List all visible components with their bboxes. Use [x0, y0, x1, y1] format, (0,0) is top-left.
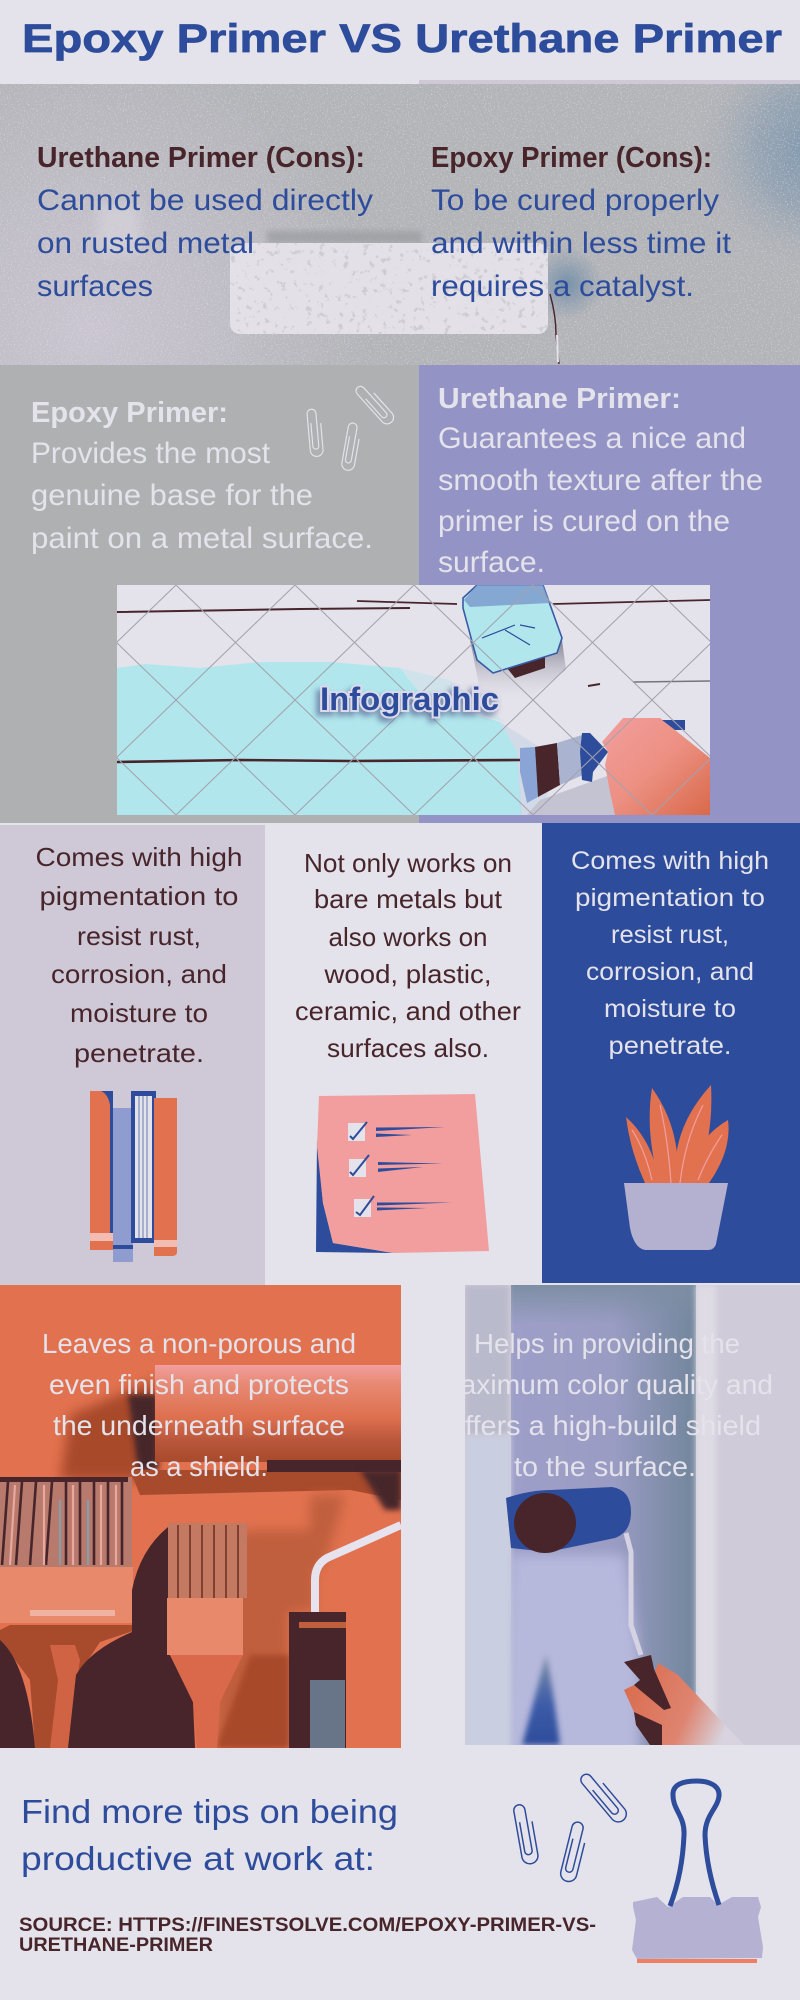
text block: call to action: Find more tips on being — [21, 1793, 398, 1830]
icon: paint brush — [520, 733, 608, 803]
text block: color quality: maximum color quality and — [437, 1369, 773, 1400]
panel: footer — [0, 1748, 800, 2000]
text block: call to action: productive at work at: — [21, 1840, 375, 1877]
text block: surfaces: wood, plastic, — [323, 959, 492, 989]
text block: source: URETHANE-PRIMER — [19, 1934, 213, 1956]
label: Infographic: Infographic — [316, 685, 496, 721]
text block: urethane primer: Guarantees a nice and — [438, 422, 746, 455]
text block: epoxy primer: paint on a metal surface. — [31, 522, 373, 555]
text block: urethane primer: primer is cured on the — [438, 505, 730, 538]
text block: epoxy cons: and within less time it — [431, 227, 732, 260]
panel: urethane primer — [419, 365, 800, 823]
text block: pigmentation repeat: moisture to — [604, 995, 736, 1023]
panel: surfaces column — [265, 825, 542, 1285]
icon: paint roller handle — [289, 1525, 401, 1748]
title: Epoxy Primer VS Urethane Primer — [22, 17, 782, 61]
text block: urethane cons: Urethane Primer (Cons): — [37, 142, 365, 174]
image: wall being rolled — [465, 1285, 800, 1760]
text block: pigmentation repeat: resist rust, — [611, 921, 729, 949]
text block: pigmentation — [36, 842, 242, 1068]
icon: books — [90, 1091, 177, 1262]
text block: pigmentation: pigmentation to — [40, 881, 238, 911]
panel: blue column — [542, 823, 800, 1283]
text block: epoxy primer: genuine base for the — [31, 479, 313, 512]
text block: surfaces: ceramic, and other — [295, 996, 521, 1026]
text block: urethane primer: surface. — [438, 546, 545, 579]
text block: urethane primer: Urethane Primer: — [438, 383, 681, 415]
text block: surfaces: also works on — [328, 922, 488, 952]
icon: binder clip — [632, 1781, 763, 1963]
icon: paper clips — [307, 382, 396, 471]
panel: orange brushes photo — [0, 1285, 401, 1748]
icon: checklist note — [316, 1094, 489, 1253]
text block: pigmentation repeat: corrosion, and — [586, 958, 754, 986]
text block: pigmentation repeat: penetrate. — [608, 1032, 732, 1060]
text block: pigmentation: corrosion, and — [51, 959, 227, 989]
icon: blue paper clips — [513, 1769, 630, 1883]
icon: small paint brush — [167, 1523, 247, 1748]
text block: color quality: offers a high-build shield — [449, 1410, 761, 1441]
text block: urethane cons — [37, 142, 373, 303]
panel: cons over paint roller photo — [0, 84, 800, 365]
text block: pigmentation repeat — [571, 847, 769, 1060]
text block: source: SOURCE: HTTPS://FINESTSOLVE.COM/EPOXY-PRIMER-VS- — [19, 1914, 596, 1936]
text block: non-porous finish: even finish and protects — [49, 1369, 349, 1400]
text block: epoxy primer: Provides the most — [31, 437, 271, 470]
text block: source — [19, 1914, 596, 1956]
text block: pigmentation repeat: Comes with high — [571, 847, 769, 875]
icon: potted plant — [624, 1085, 729, 1250]
text block: urethane primer — [438, 383, 763, 579]
text block: epoxy cons: To be cured properly — [431, 184, 719, 217]
text block: surfaces: surfaces also. — [327, 1033, 489, 1063]
icon: wide paint brush — [0, 1477, 133, 1748]
text block: urethane cons: on rusted metal — [37, 227, 254, 260]
text block: pigmentation: penetrate. — [74, 1038, 204, 1068]
text block: urethane cons: surfaces — [37, 270, 153, 303]
text block: non-porous finish: as a shield. — [130, 1451, 268, 1482]
text block: epoxy primer: Epoxy Primer: — [31, 397, 228, 429]
text block: surfaces: Not only works on — [304, 848, 512, 878]
icon: paint tray — [463, 585, 562, 678]
panel: blue roller photo — [465, 1285, 800, 1745]
text block: epoxy cons: requires a catalyst. — [431, 270, 694, 303]
text block: epoxy cons: Epoxy Primer (Cons): — [431, 142, 712, 174]
panel: pigmentation column — [0, 825, 265, 1285]
text block: urethane primer: smooth texture after the — [438, 464, 763, 497]
text block: non-porous finish: the underneath surface — [53, 1410, 345, 1441]
header panel — [0, 0, 800, 84]
text block: pigmentation repeat: pigmentation to — [575, 884, 765, 912]
text block: epoxy cons — [431, 142, 732, 303]
dark shadow between brushes — [68, 1527, 195, 1748]
text block: epoxy primer — [31, 397, 373, 555]
icon: hand — [602, 718, 710, 815]
image: painting a board, infographic banner — [117, 585, 710, 815]
text block: pigmentation: moisture to — [70, 998, 208, 1028]
background shading — [60, 1380, 155, 1480]
text block: color quality: Helps in providing the — [474, 1328, 740, 1359]
text block: non-porous finish: Leaves a non-porous and — [42, 1328, 356, 1359]
text block: pigmentation: resist rust, — [77, 921, 201, 951]
icon: paint roller — [230, 243, 559, 364]
text block: color quality — [437, 1328, 773, 1482]
text block: surfaces: bare metals but — [314, 884, 503, 914]
text block: non-porous finish — [42, 1328, 356, 1482]
icon: hand holding roller — [624, 1655, 726, 1745]
text block: color quality: to the surface. — [514, 1451, 696, 1482]
label: Infographic: Infographic — [320, 681, 499, 717]
text block: call to action — [21, 1793, 398, 1877]
text block: pigmentation: Comes with high — [36, 842, 242, 872]
panel: epoxy primer — [0, 365, 419, 823]
icon: blue paint roller — [506, 1487, 641, 1655]
text block: surfaces — [295, 848, 521, 1063]
text block: urethane cons: Cannot be used directly — [37, 184, 373, 217]
